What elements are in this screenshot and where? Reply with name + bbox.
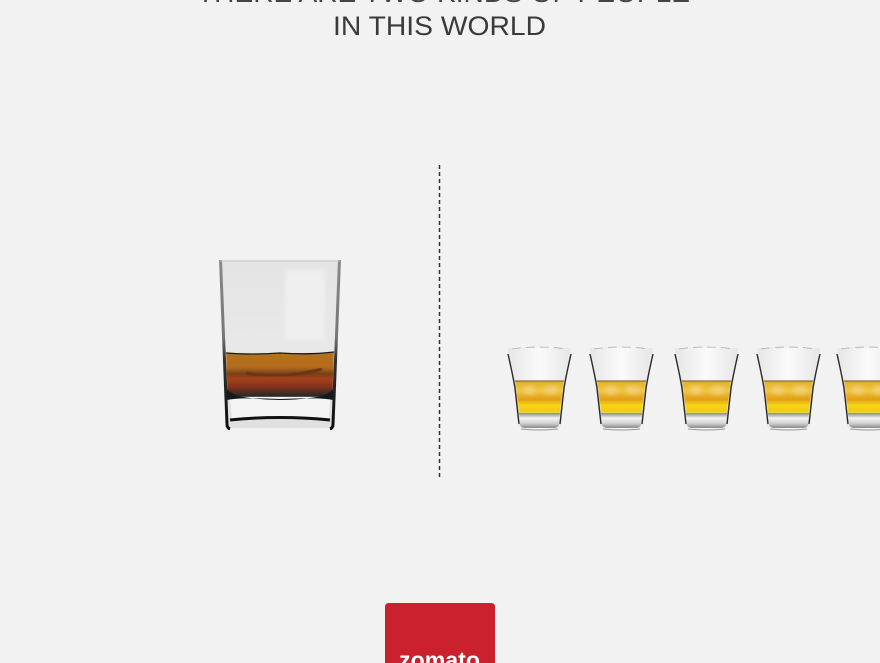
icon: shot glass 3 <box>675 347 738 430</box>
title <box>197 0 690 41</box>
icon: row of shot glasses <box>508 347 880 430</box>
icon: shot glass 5 <box>837 347 880 430</box>
icon: large whisky tumbler <box>220 260 340 429</box>
title: IN THIS WORLD <box>333 11 546 41</box>
icon: shot glass 1 <box>508 347 571 430</box>
icon: shot glass 2 <box>590 347 653 430</box>
dashed divider <box>438 165 440 478</box>
icon: shot glass 4 <box>757 347 820 430</box>
logo: zomato <box>385 603 495 663</box>
